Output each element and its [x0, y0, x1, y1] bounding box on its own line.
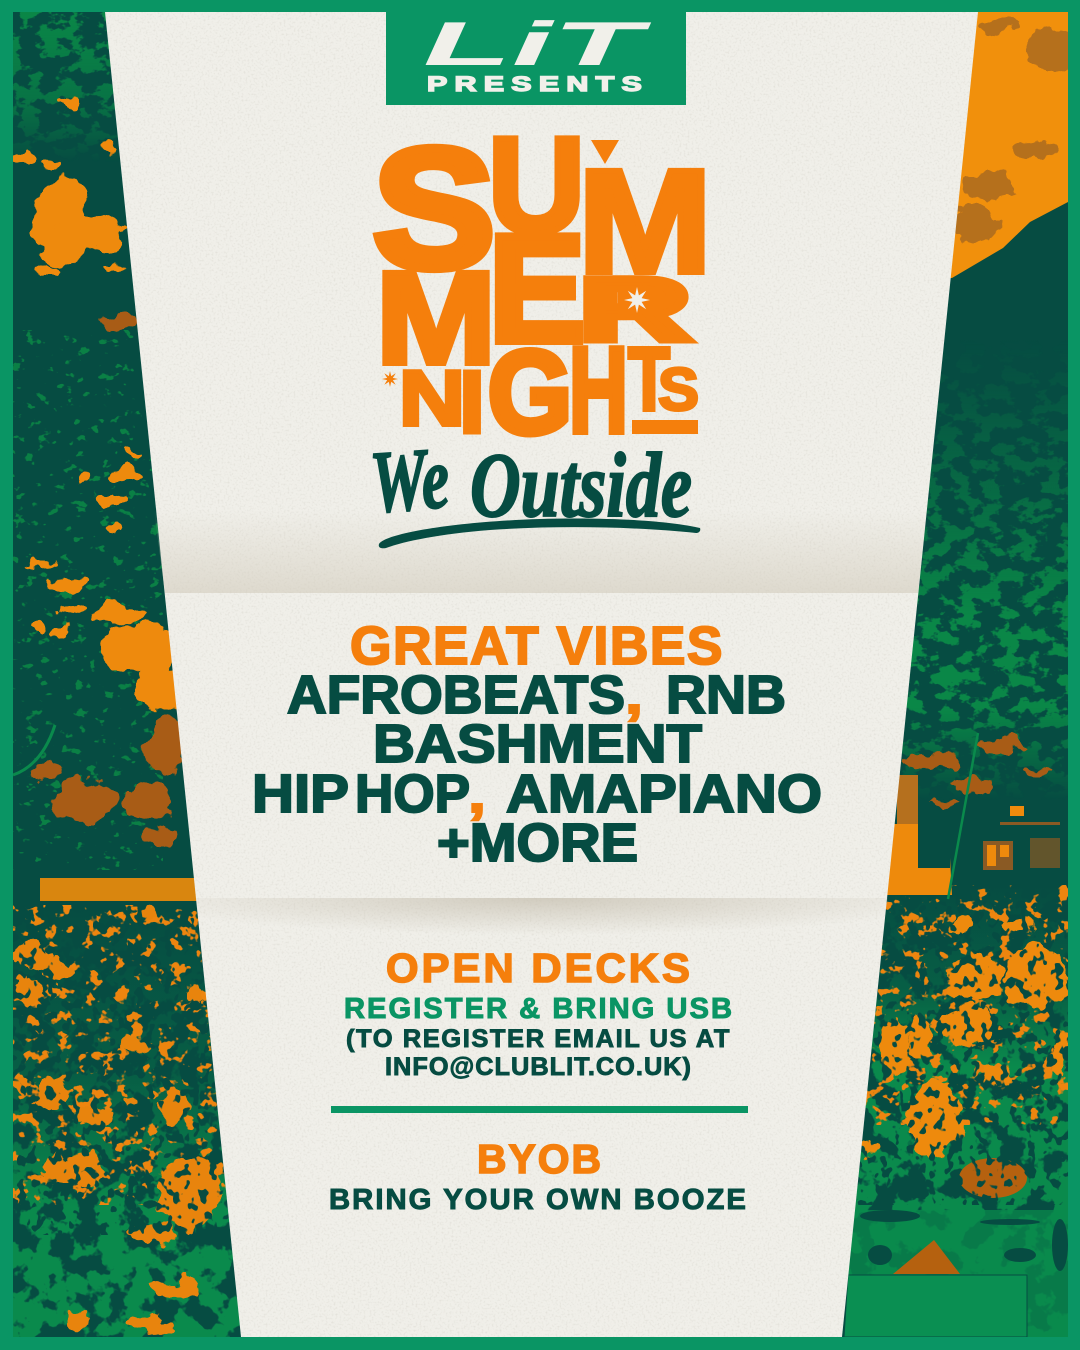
divider — [331, 1106, 748, 1113]
line: +more: +MORE — [437, 813, 638, 873]
green tree branch arc — [13, 725, 55, 775]
registration note: (TO REGISTER EMAIL US AT — [346, 1025, 731, 1053]
right crowd — [844, 885, 1068, 1337]
right building — [885, 775, 1060, 895]
top right sky — [945, 12, 1068, 278]
orange roof dashes, right — [902, 739, 1056, 810]
line: hip hop, amapiano: , — [468, 764, 486, 824]
title: Summer Nights: G — [488, 327, 572, 459]
heading: byob: BYOB — [477, 1136, 603, 1182]
line: afrobeats, rnb: AFROBEATS — [287, 665, 625, 725]
LIT wordmark: LiT — [423, 10, 653, 79]
title: Summer Nights — [373, 109, 712, 459]
title: Summer Nights: H — [569, 322, 628, 458]
register and bring usb: REGISTER & BRING USB — [344, 993, 734, 1025]
title: Summer Nights: S — [373, 114, 495, 304]
music list — [252, 616, 822, 873]
paper panel — [105, 12, 978, 1337]
presents: PRESENTS — [427, 73, 649, 96]
building strip, left — [40, 878, 200, 901]
star: small orange — [382, 371, 398, 387]
green pole — [948, 733, 978, 899]
line: hip hop, amapiano — [252, 764, 822, 824]
title: Summer Nights: E — [489, 204, 585, 374]
tagline: We Outside: Outside — [470, 434, 692, 536]
line: afrobeats, rnb: RNB — [666, 665, 786, 725]
title: Summer Nights: U — [488, 109, 585, 261]
email address: INFO@CLUBLIT.CO.UK) — [385, 1053, 692, 1081]
byob block — [329, 1136, 748, 1216]
bring your own booze: BRING YOUR OWN BOOZE — [329, 1184, 748, 1216]
open decks block — [344, 945, 734, 1081]
orange foliage, left — [15, 96, 186, 710]
title: Summer Nights: M — [578, 140, 712, 304]
tagline: We Outside: We — [368, 430, 452, 532]
line: afrobeats, rnb: , — [625, 665, 643, 725]
line: hip hop, amapiano: AMAPIANO — [506, 764, 822, 824]
dark dashes above stage — [860, 1210, 1068, 1271]
title: Summer Nights: N — [399, 354, 465, 442]
tagline: We Outside — [368, 430, 700, 548]
stage box — [844, 1275, 1027, 1337]
green lower right — [848, 1210, 1068, 1337]
title: Summer Nights: T — [628, 330, 670, 430]
line: afrobeats, rnb — [287, 665, 786, 725]
line: bashment: BASHMENT — [373, 714, 702, 774]
title: Summer Nights: R — [579, 259, 691, 359]
underline brush stroke — [379, 518, 700, 548]
heading: great vibes: GREAT VIBES — [350, 616, 724, 676]
title: Summer Nights: I — [458, 353, 486, 453]
line: hip hop, amapiano: HIP — [252, 764, 349, 824]
title: Summer Nights: M — [376, 244, 496, 391]
left crowd — [13, 905, 253, 1337]
star: white in R — [624, 287, 650, 313]
line: hip hop, amapiano: HOP — [355, 764, 470, 824]
logo tab: LIT presents — [386, 10, 686, 105]
title: Summer Nights: S — [658, 356, 699, 423]
heading: open decks: OPEN DECKS — [386, 945, 693, 991]
